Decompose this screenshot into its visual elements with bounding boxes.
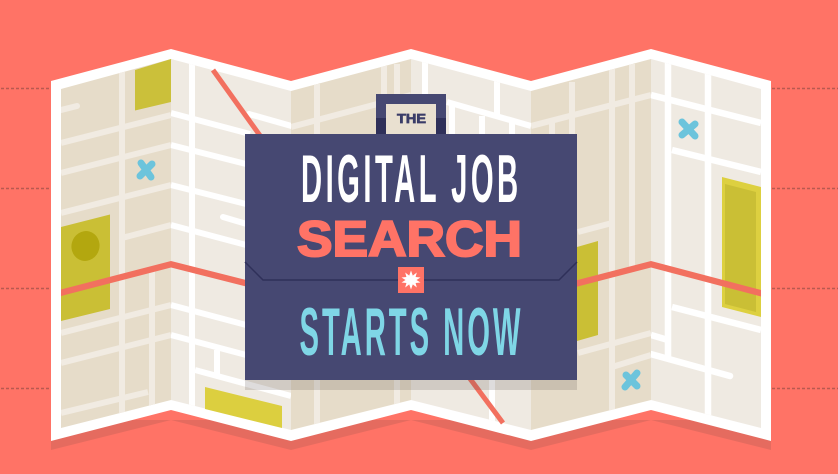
- map white border: [51, 49, 771, 441]
- map panel 5: [531, 59, 651, 430]
- clasp: [398, 267, 424, 293]
- icon: blue x marker: [140, 163, 152, 177]
- map drop shadow: [51, 420, 771, 450]
- case body: [245, 134, 577, 380]
- case handle: [376, 94, 446, 134]
- red road across map right: [570, 261, 761, 296]
- case shadow: [245, 380, 577, 390]
- map panel 6: [645, 59, 761, 428]
- map panel 1: [55, 59, 180, 428]
- red diagonal road lower: [468, 376, 503, 423]
- heading: digital job: DIGITAL JOB: [301, 142, 518, 218]
- yellow block bottom: [205, 387, 282, 428]
- map panel 2: [171, 59, 295, 430]
- heading: search: SEARCH: [297, 211, 522, 267]
- label: the: THE: [397, 111, 426, 126]
- folded map: [51, 49, 771, 441]
- icon: blue x marker: [625, 373, 637, 387]
- case flap line: [245, 262, 577, 280]
- yellow block top: [135, 59, 180, 110]
- map panel 4: [411, 59, 531, 430]
- briefcase: [245, 94, 577, 390]
- heading: starts now: STARTS NOW: [300, 295, 521, 371]
- yellow block right: [722, 177, 761, 317]
- yellow block behind case: [577, 241, 598, 341]
- map panel 3: [291, 59, 411, 430]
- red road across map: [61, 261, 250, 296]
- red diagonal road: [213, 70, 261, 137]
- yellow block with circle: [61, 214, 110, 321]
- icon: blue x marker: [682, 122, 695, 136]
